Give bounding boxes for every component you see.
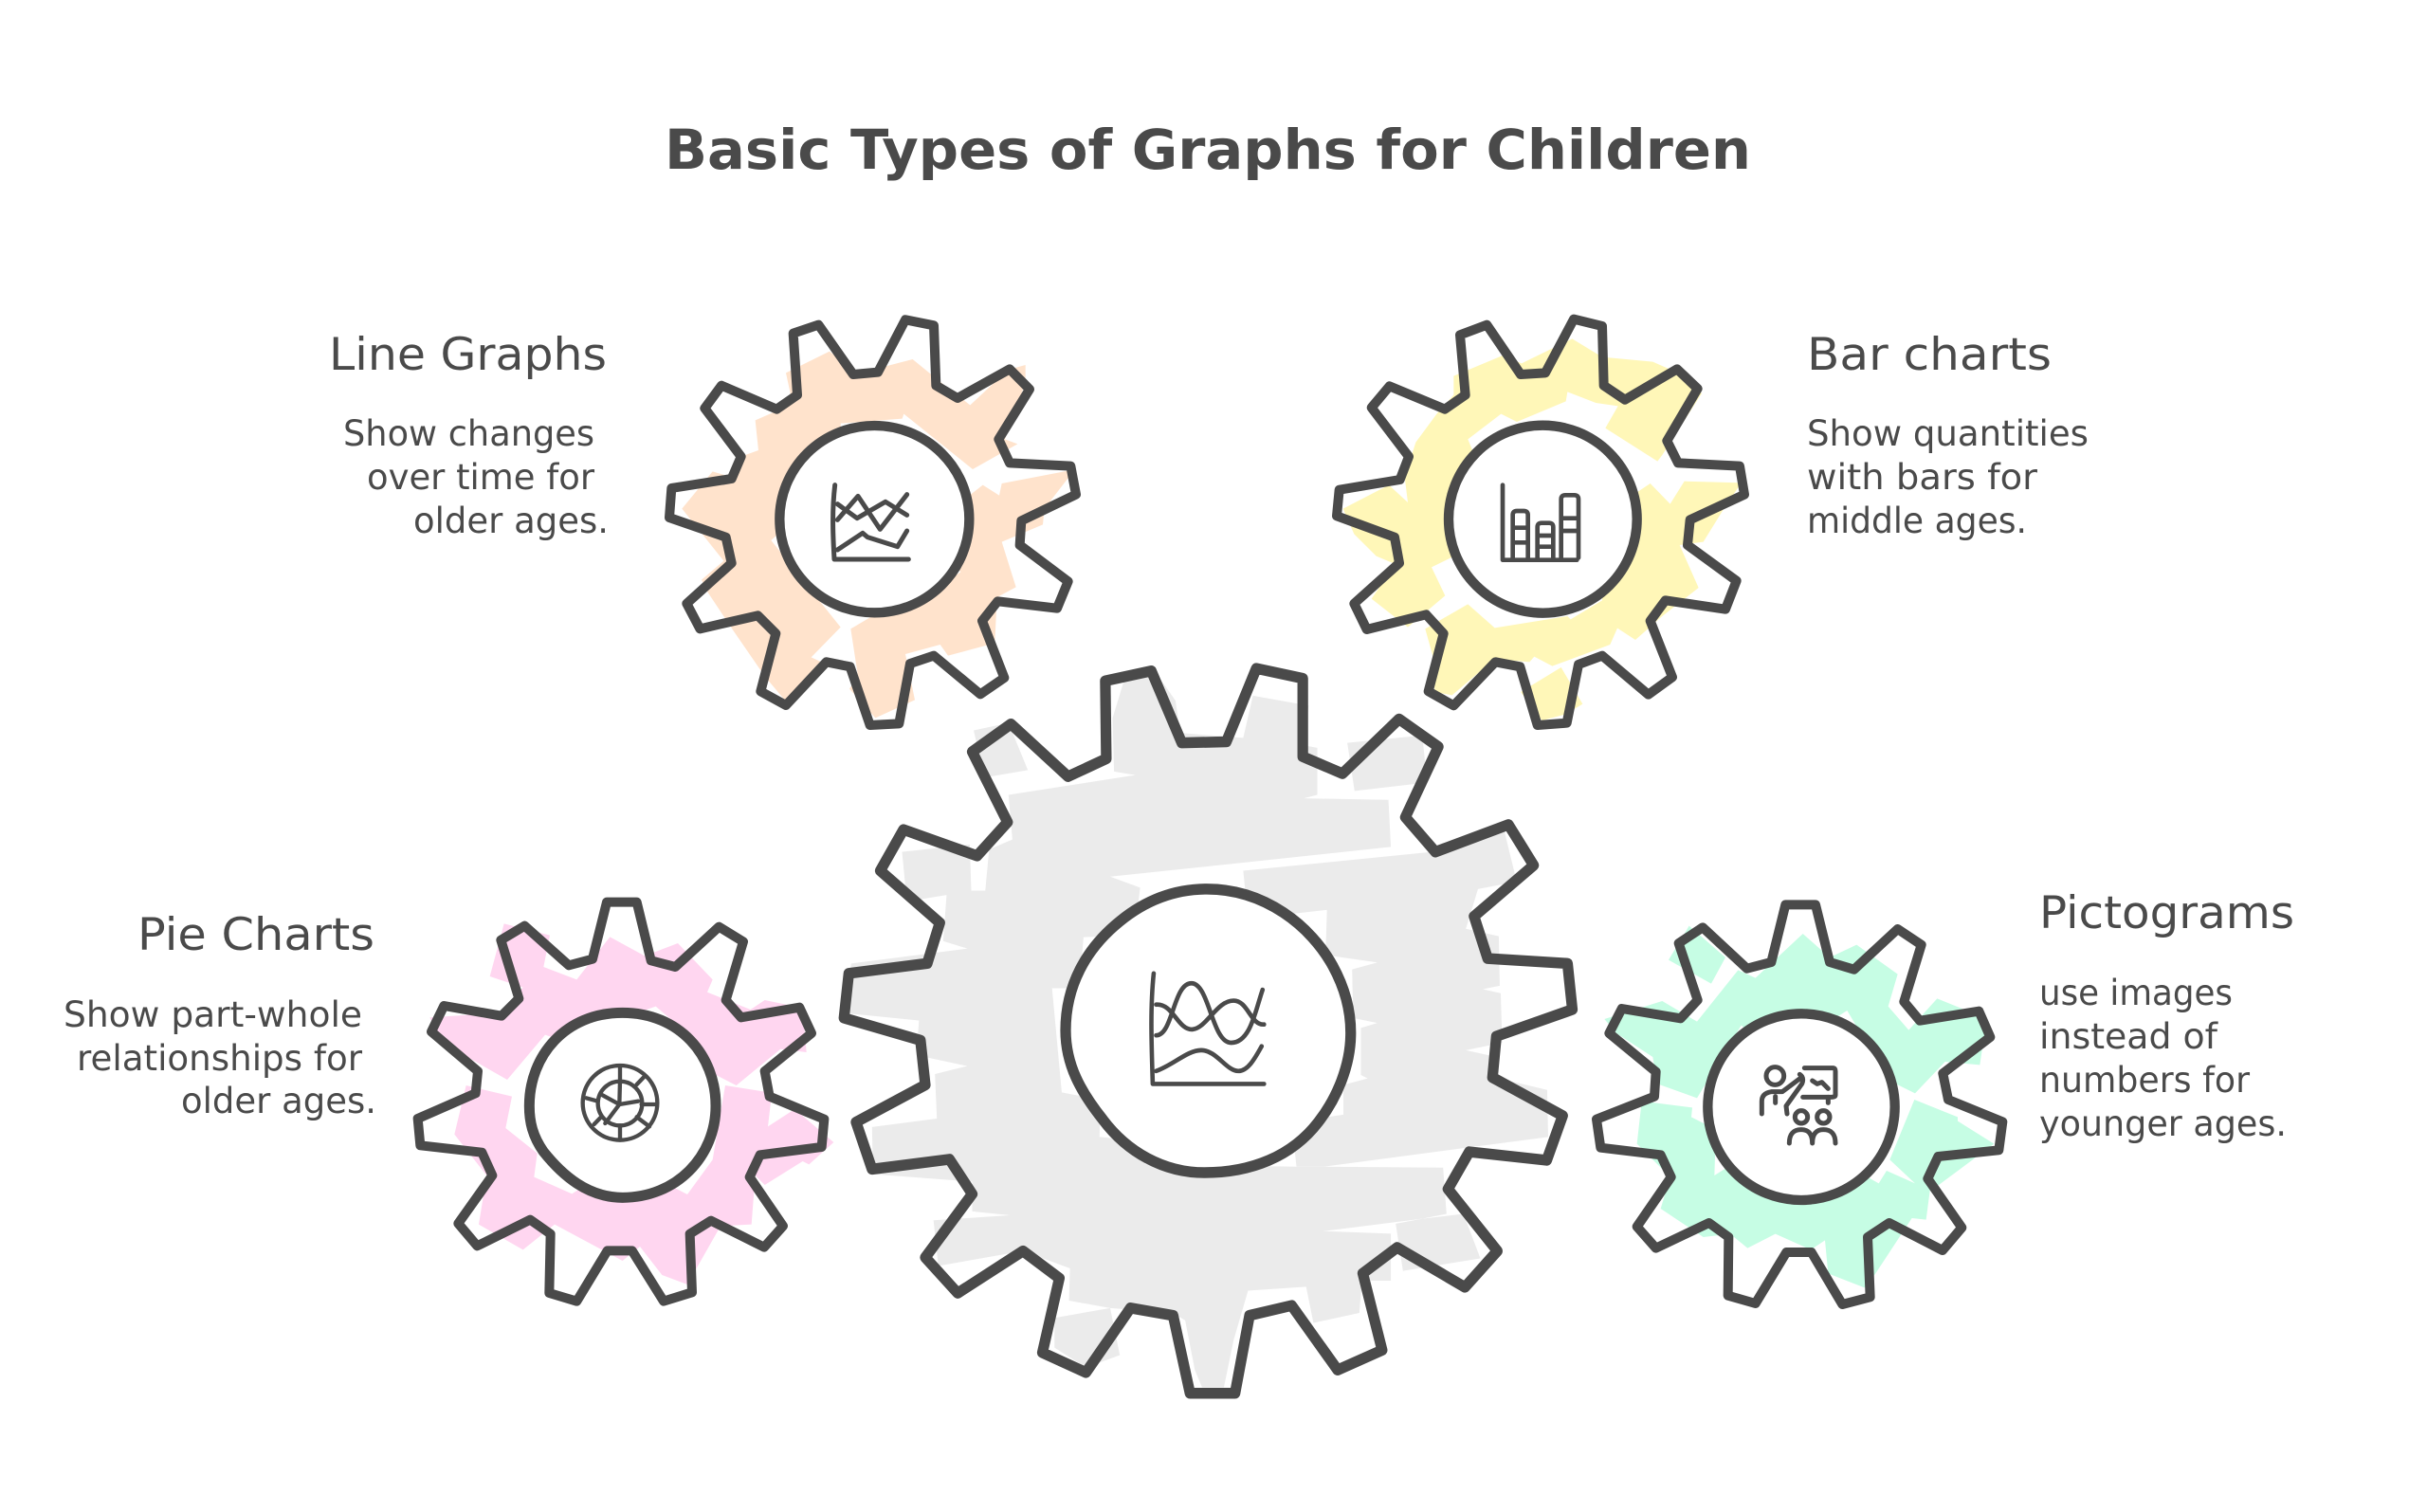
heading: Pictograms (2039, 887, 2294, 939)
panel: central gear (844, 666, 1573, 1394)
gear hub (779, 426, 969, 612)
icon: pie chart (583, 1066, 657, 1140)
description: Show changes (343, 413, 594, 454)
gear hub (529, 1012, 716, 1197)
gear outline (418, 902, 824, 1302)
heading: Pie Charts (137, 909, 374, 961)
icon: line graph (833, 485, 908, 559)
label: bar charts (1807, 329, 2089, 541)
description: with bars for (1807, 457, 2038, 498)
heading: Bar charts (1807, 329, 2052, 381)
description: older ages. (181, 1081, 376, 1121)
icon: teacher presenting pictogram (1761, 1067, 1835, 1143)
gear outline (669, 319, 1076, 725)
description (1807, 413, 2089, 541)
description (343, 413, 609, 541)
gear outline (1597, 904, 2002, 1304)
description: older ages. (413, 501, 609, 541)
description: relationships for (77, 1038, 363, 1079)
gear fill: grey scribble (844, 666, 1548, 1388)
description (64, 994, 376, 1121)
label: line graphs (329, 329, 609, 541)
icon: bar chart (1503, 485, 1578, 560)
gear outline (844, 668, 1573, 1394)
gear fill: green scribble (1604, 926, 1994, 1287)
gear hub (1707, 1013, 1895, 1200)
description: Show part-whole (64, 994, 362, 1035)
description: numbers for (2039, 1060, 2251, 1101)
gear fill: pink scribble (429, 923, 833, 1284)
label: pie charts (64, 909, 376, 1121)
gear hub (1066, 889, 1351, 1173)
heading: Line Graphs (329, 329, 607, 381)
gear fill: orange scribble (682, 352, 1071, 718)
panel: line graphs gear (669, 319, 1076, 725)
panel: bar charts gear (1337, 319, 1744, 725)
description: instead of (2039, 1016, 2218, 1057)
description (2039, 973, 2287, 1144)
description: younger ages. (2039, 1103, 2287, 1144)
title: Basic Types of Graphs for Children (665, 118, 1751, 182)
description: over time for (367, 457, 595, 498)
gear outline (1337, 319, 1744, 725)
description: Show quantities (1807, 413, 2089, 454)
description: middle ages. (1807, 501, 2027, 541)
description: use images (2039, 973, 2233, 1013)
panel: pie charts gear (418, 902, 833, 1302)
gear hub (1449, 426, 1637, 613)
gear fill: yellow scribble (1343, 338, 1742, 720)
label: pictograms (2039, 887, 2294, 1144)
icon: multi-curve graph (1151, 974, 1264, 1084)
panel: pictograms gear (1597, 904, 2002, 1304)
